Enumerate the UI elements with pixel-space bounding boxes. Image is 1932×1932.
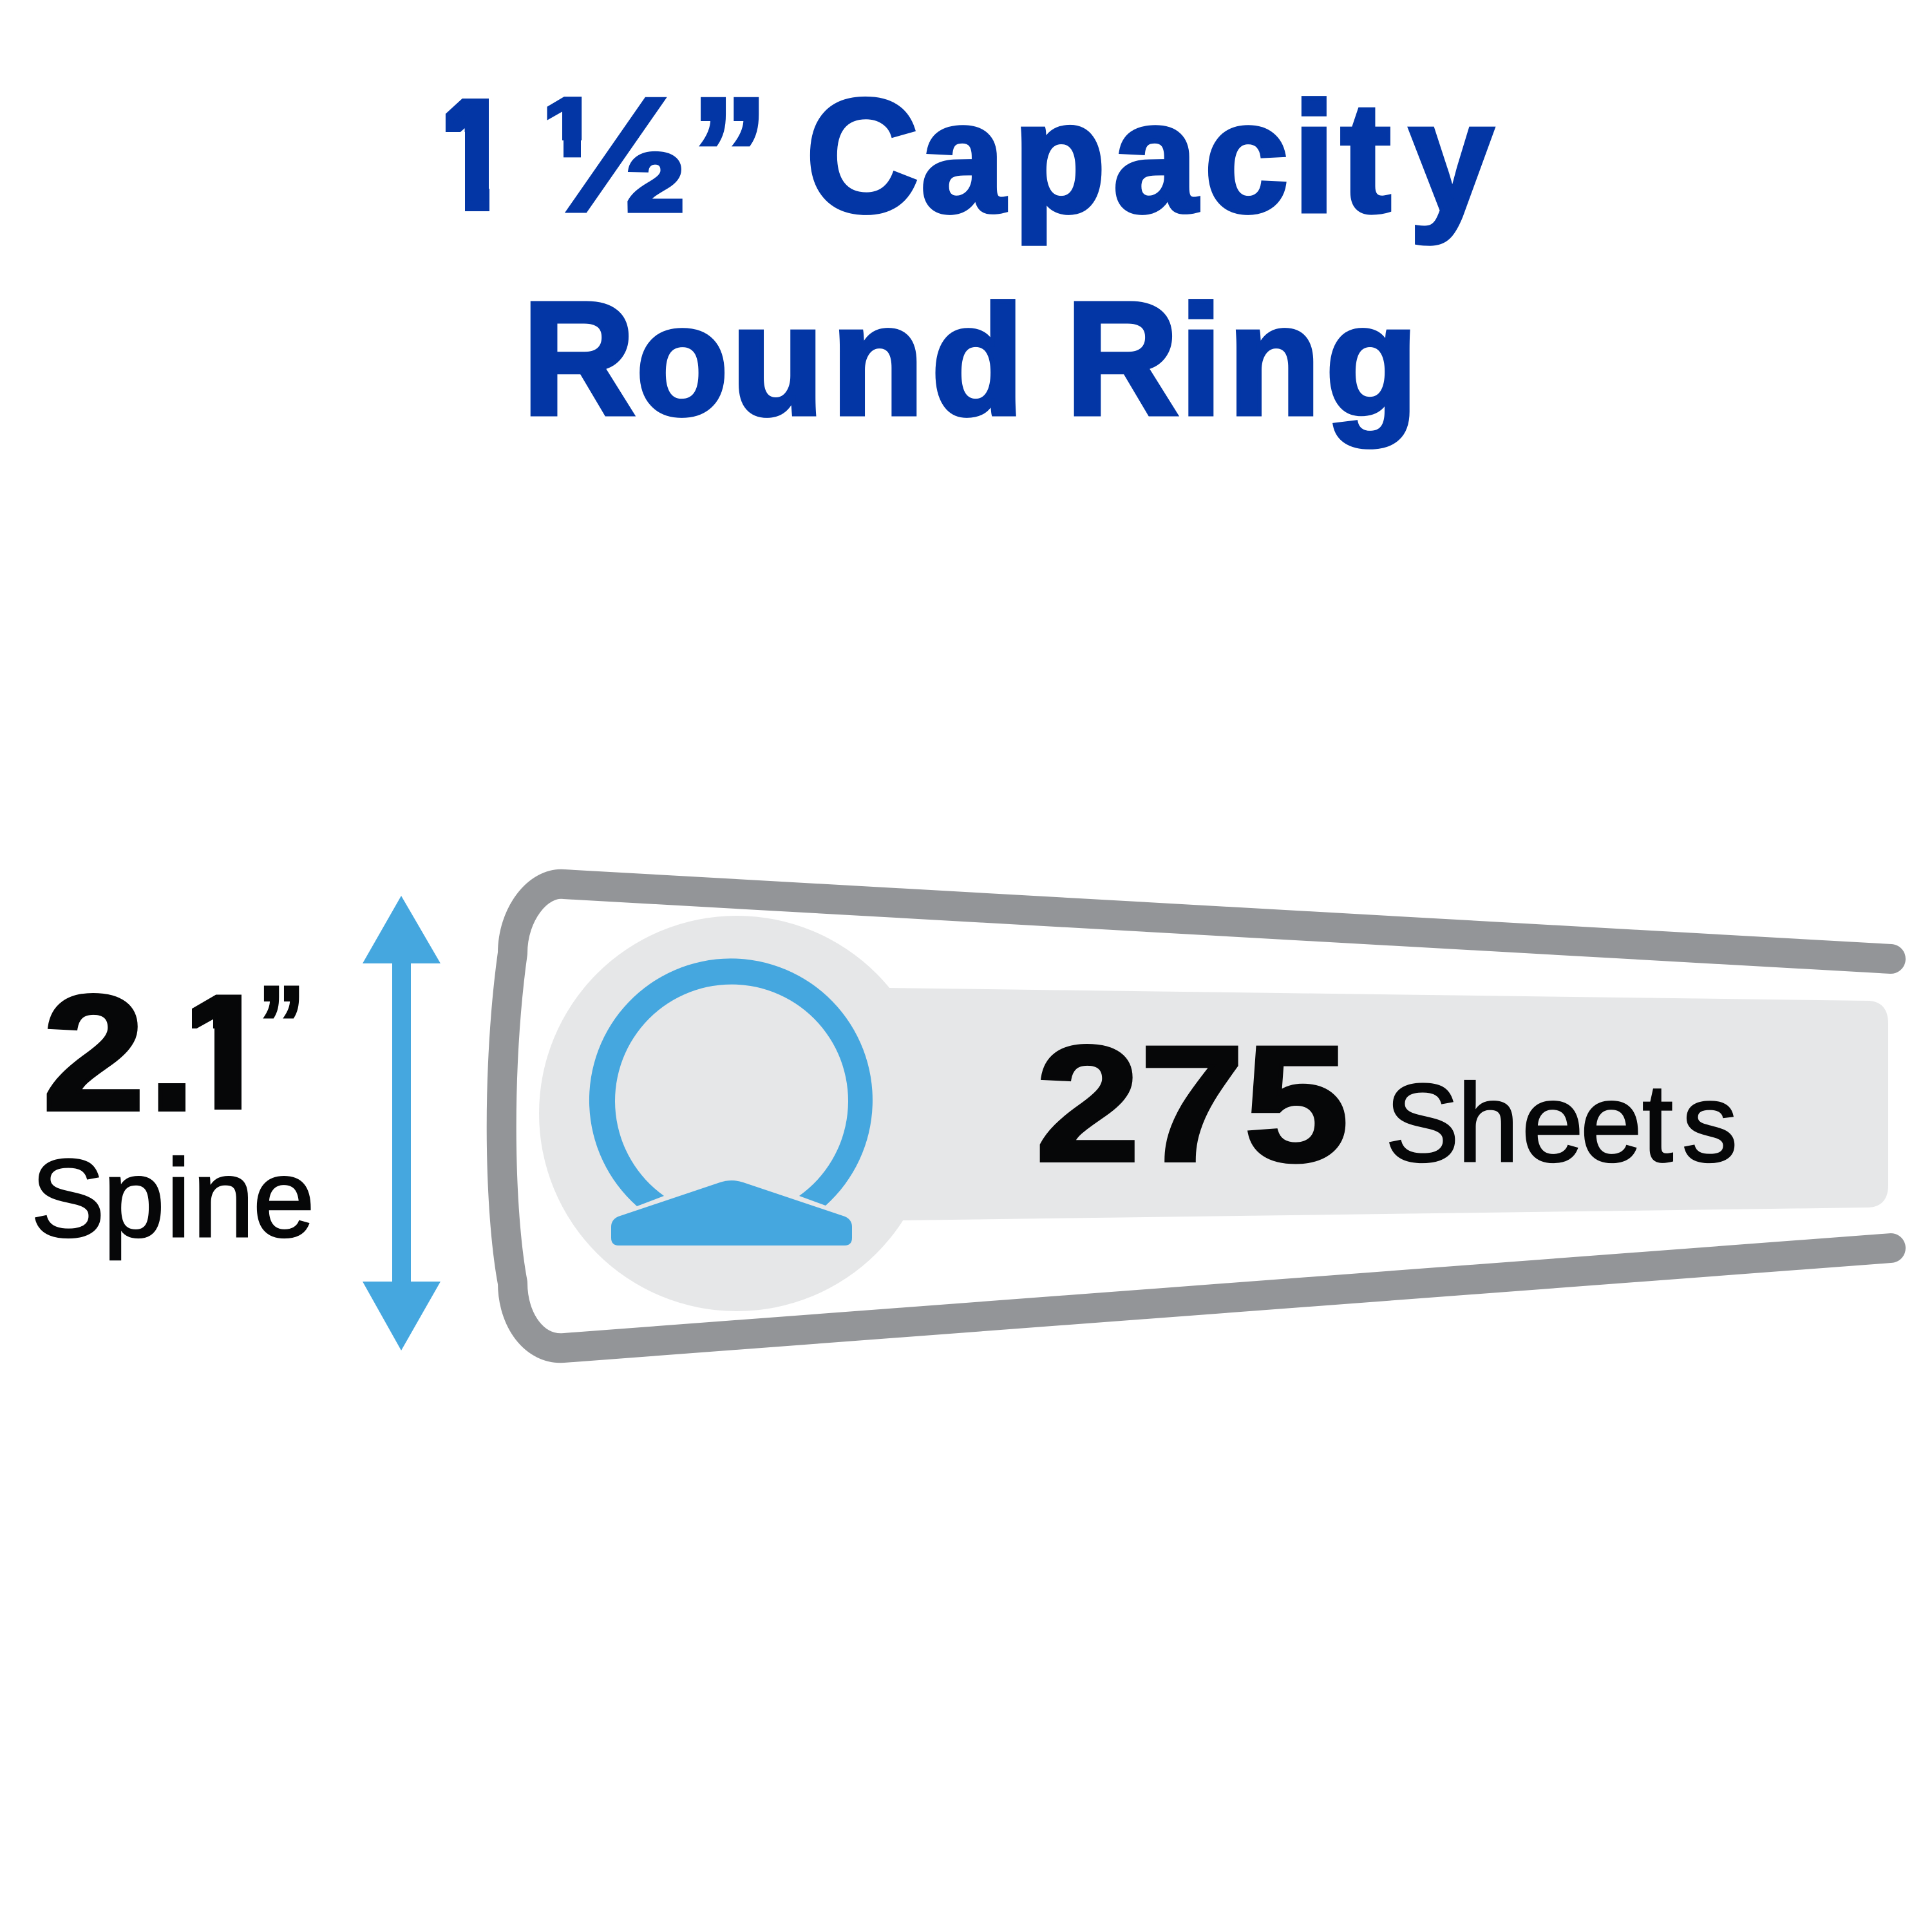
arrow: spine height xyxy=(363,896,440,1350)
ring base xyxy=(611,1180,852,1245)
title xyxy=(442,63,1493,449)
capacity tab xyxy=(773,988,1888,1220)
spine caption: Spine xyxy=(31,1137,315,1260)
title line 1: capacity xyxy=(446,96,1495,246)
capacity label xyxy=(1036,1012,1738,1196)
spine value xyxy=(46,985,299,1112)
spine measurement label xyxy=(35,985,310,1261)
sheet count: 275 xyxy=(1036,1012,1349,1196)
title line 1: capacity: ” xyxy=(690,63,769,246)
infographic canvas xyxy=(35,96,1906,1363)
title line 1: capacity: 1 xyxy=(442,63,506,246)
spine value: ” xyxy=(258,963,305,1086)
title line 2: ring type: Round Ring xyxy=(522,269,1418,449)
spine value: 2.1 xyxy=(43,961,275,1145)
ring arc xyxy=(589,958,873,1206)
title line 1: capacity: Capacity xyxy=(806,66,1493,246)
ring backdrop circle xyxy=(539,916,934,1311)
binder outline xyxy=(502,884,1891,1348)
title line 1: capacity: ½ xyxy=(540,63,689,246)
sheets caption: Sheets xyxy=(1385,1061,1738,1185)
icon: round ring xyxy=(589,958,873,1245)
panel: sheet capacity background xyxy=(539,916,1888,1311)
